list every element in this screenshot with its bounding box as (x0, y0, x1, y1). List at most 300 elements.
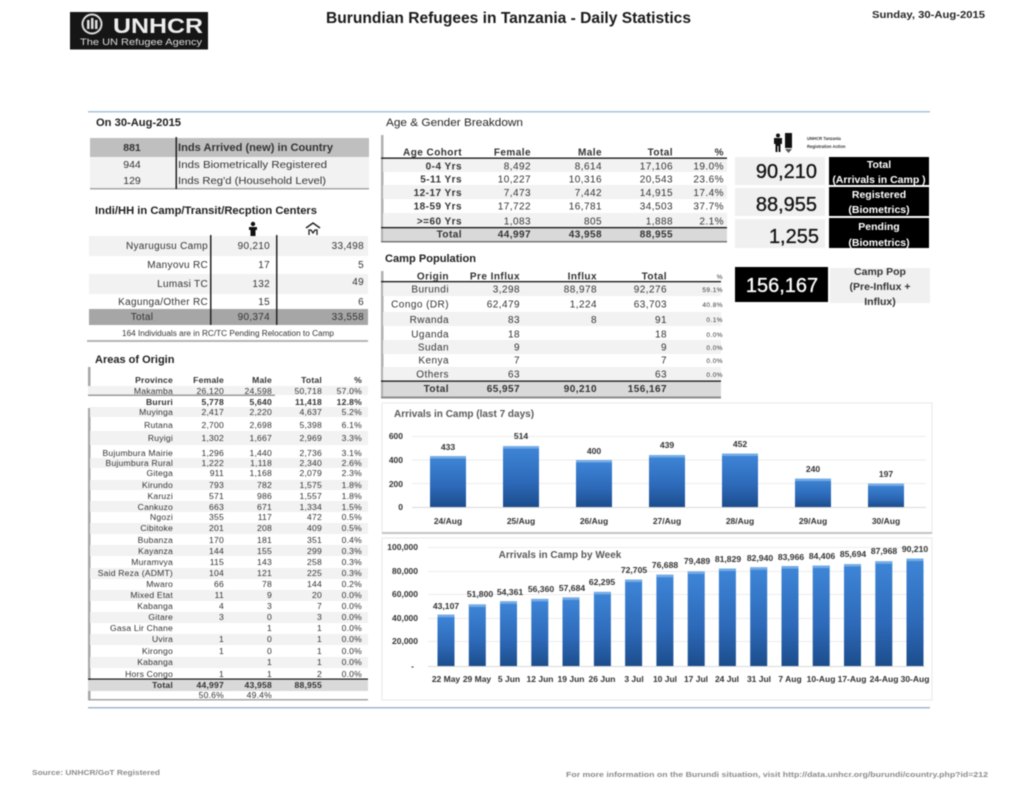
panel: camp population table: 63 (508, 370, 520, 380)
panel: camp population table: Uganda (411, 330, 449, 340)
table rows: 1,118 (250, 458, 272, 468)
panel: camp population table: 9 (514, 342, 520, 354)
table rows: Kayanza (138, 546, 173, 556)
table total: 50.6% (199, 690, 224, 700)
table rows: Said Reza (ADMT) (98, 568, 173, 578)
panel: age and gender table: 8,492 (504, 162, 531, 172)
table rows: 225 (307, 568, 322, 578)
table rows: Gitega (146, 468, 173, 478)
panel: camp population table: 88,978 (564, 284, 597, 296)
table rows: 144 (209, 546, 224, 556)
panel: camp population table: 62,479 (487, 300, 520, 310)
table rows: Bujumbura Mairie (102, 448, 173, 458)
table rows: 3.3% (342, 433, 362, 443)
table rows: Kabanga (137, 601, 173, 611)
footer: more information: For more information on the Burundi situation, visit http://data.unhcr.org/burundi/country.php?id=212 (566, 770, 988, 779)
panel: daily arrivals table: Inds Biometrically Registered (178, 159, 327, 171)
panel: camp population total: 156,167 (746, 275, 818, 297)
x axis labels: 17 Jul (684, 674, 708, 684)
table header: % (354, 375, 362, 385)
table rows: 1,440 (249, 448, 272, 458)
table rows: 1 (267, 669, 272, 679)
panel: age and gender table: Male (578, 148, 602, 158)
text: registration action note (807, 136, 846, 149)
table rows: Cibitoke (140, 523, 173, 533)
table rows: 5,398 (299, 420, 322, 430)
table rows: 2,220 (249, 407, 272, 417)
table rows: Makamba (134, 386, 173, 396)
panel: camp population table: Kenya (418, 356, 449, 366)
x axis labels: 10-Aug (807, 674, 835, 684)
table rows: 2,340 (299, 458, 322, 468)
panel: camp and transit table: Nyarugusu Camp (126, 241, 208, 252)
data labels: 62,295 (589, 577, 615, 587)
panel: age and gender table: 10,316 (569, 174, 602, 186)
x axis labels: 5 Jun (498, 674, 520, 684)
bar highlights (430, 446, 904, 486)
table rows: 78 (262, 579, 272, 589)
panel: age and gender table (381, 135, 727, 242)
panel: age and gender table: 10,227 (498, 174, 531, 186)
table rows: 24,598 (244, 386, 272, 396)
table rows: 208 (257, 523, 272, 533)
panel: camp population table: 92,276 (634, 284, 667, 296)
table rows: 115 (210, 557, 224, 567)
text: registration action note: Registration Action (807, 144, 846, 149)
table rows: Rutana (144, 420, 173, 430)
top rule (88, 111, 930, 112)
panel: camp population table: 63,703 (634, 300, 667, 310)
panel: camp and transit table: 17 (258, 260, 270, 271)
data labels: 83,966 (778, 552, 804, 562)
panel: camp population table: 3,298 (493, 284, 520, 296)
table rows: 0 (267, 612, 272, 622)
table rows: 66 (214, 579, 224, 589)
panel: camp population table: 7 (661, 356, 667, 366)
panel: age and gender table: 7,473 (504, 188, 531, 199)
panel: camp and transit table: 49 (352, 277, 364, 288)
table rows: Cankuzo (138, 502, 173, 512)
x axis labels: 29 May (463, 674, 491, 684)
table rows: 1 (267, 623, 272, 633)
x axis labels: 17-Aug (838, 674, 866, 684)
panel: pending biometrics: Pending (858, 221, 900, 233)
text: registration action note: UNHCR Tanzania (807, 136, 842, 141)
table rows: 986 (257, 491, 272, 501)
table rows: 6.1% (342, 420, 362, 430)
table rows: 11 (215, 590, 224, 600)
table rows: 4,637 (299, 407, 322, 417)
panel: camp population table: 18 (655, 330, 667, 340)
data labels: 81,829 (715, 554, 741, 564)
x axis labels: 31 Jul (747, 674, 771, 684)
panel: age and gender table: 12-17 Yrs (414, 188, 462, 199)
panel: camp and transit table (87, 235, 368, 342)
bottom rule (88, 707, 930, 708)
y axis: 0 (398, 502, 403, 512)
table rows: 117 (258, 512, 272, 522)
chart: arrivals in camp last 7 days (382, 403, 932, 534)
panel: camp and transit table: 33,498 (332, 241, 364, 252)
panel: age and gender table: 34,503 (640, 202, 673, 212)
y axis: 100,000 (387, 542, 418, 552)
panel: camp population table: 0.0% (706, 332, 723, 339)
data labels: 79,489 (684, 556, 710, 566)
panel: camp population table: 0.0% (706, 358, 723, 365)
heading: age and gender: Age & Gender Breakdown (386, 117, 523, 129)
chart title: Arrivals in Camp by Week (499, 550, 622, 561)
data labels: 87,968 (871, 546, 897, 556)
data labels: 433 (441, 442, 455, 452)
panel: camp and transit table: 132 (252, 279, 270, 290)
data labels: 400 (587, 446, 601, 456)
x axis labels: 22 May (432, 674, 460, 684)
table rows: 3.1% (342, 448, 362, 458)
x axis labels: 10 Jul (653, 674, 677, 684)
table rows: 472 (307, 512, 322, 522)
table rows: Bujumbura Rural (106, 458, 173, 468)
table rows: 2.6% (342, 458, 362, 468)
panel: camp population table: Total (642, 272, 667, 282)
table total: 88,955 (294, 680, 322, 690)
data labels: 57,684 (559, 583, 585, 593)
table rows: 258 (307, 557, 322, 567)
table rows: Gitare (148, 612, 173, 622)
table rows: 1.8% (342, 480, 362, 490)
table rows: 0.5% (342, 523, 362, 533)
table rows: 2,698 (249, 420, 272, 430)
table rows: 351 (307, 535, 322, 545)
table rows: 2,969 (299, 433, 322, 443)
x axis labels: 12 Jun (527, 674, 553, 684)
table rows: 2,079 (299, 468, 322, 478)
data labels: 85,694 (840, 549, 866, 559)
table rows: 1 (317, 634, 322, 644)
panel: camp population table: Congo (DR) (391, 300, 449, 310)
panel: registered biometrics: (Biometrics) (848, 204, 910, 216)
panel: camp and transit table: 33,558 (332, 312, 364, 323)
panel: camp population total: (Pre-Influx + (850, 281, 910, 293)
x axis labels: 24 Jul (715, 674, 739, 684)
table rows: 1,222 (201, 458, 224, 468)
panel: camp population table: Rwanda (410, 315, 449, 326)
footer: source: Source: UNHCR/GoT Registered (32, 768, 160, 777)
chart title: Arrivals in Camp (last 7 days) (394, 409, 534, 420)
table rows: 793 (209, 480, 224, 490)
panel: age and gender table: 1,083 (504, 216, 531, 228)
table rows: 0.5% (342, 512, 362, 522)
table total: Total (152, 680, 173, 690)
table rows: 0.0% (342, 590, 362, 600)
table rows: 2 (317, 669, 322, 679)
table rows: 181 (257, 535, 272, 545)
title: Burundian Refugees in Tanzania - Daily Statistics (326, 10, 691, 27)
y axis: 80,000 (392, 566, 418, 576)
x axis labels: 19 Jun (558, 674, 584, 684)
panel: daily arrivals table: 881 (123, 142, 141, 154)
panel: age and gender table: 2.1% (699, 216, 724, 228)
data labels: 240 (806, 464, 820, 474)
table rows: Kirundo (142, 480, 173, 490)
logo: UNHCR: UNHCR (113, 15, 203, 38)
table rows: 1.8% (342, 491, 362, 501)
heading: areas of origin: Areas of Origin (95, 354, 175, 366)
panel: camp population total: Camp Pop (854, 266, 906, 278)
panel: camp population table: Others (416, 370, 449, 380)
table rows: 0.3% (342, 568, 362, 578)
panel: camp population table: 63 (655, 370, 667, 380)
x axis labels: 24/Aug (434, 516, 462, 526)
y axis: - (411, 661, 414, 671)
table rows: 3 (317, 612, 322, 622)
data labels (433, 544, 928, 611)
panel: camp population table: 156,167 (628, 384, 667, 395)
table rows: 0.0% (342, 634, 362, 644)
table rows: 1,667 (249, 433, 272, 443)
table rows: Kabanga (137, 657, 173, 667)
table rows: 1,302 (201, 433, 224, 443)
table rows: 5,640 (249, 397, 272, 407)
table rows: 3 (219, 612, 224, 622)
table rows: Ruyigi (148, 433, 173, 443)
table rows: Bubanza (138, 535, 173, 545)
table rows: 0.2% (342, 579, 362, 589)
panel: camp population table: 90,210 (564, 384, 597, 395)
table rows: 782 (257, 480, 272, 490)
panel: total arrivals in camp: 90,210 (756, 161, 817, 183)
panel: age and gender table: Age Cohort (403, 148, 462, 158)
table header (135, 375, 362, 385)
x axis labels: 30/Aug (872, 516, 900, 526)
panel: camp population table (381, 271, 723, 398)
icon: house (306, 223, 320, 235)
table rows: 1,557 (299, 491, 322, 501)
panel: age and gender table: 17.4% (693, 188, 724, 199)
panel: camp and transit table: 5 (358, 260, 364, 271)
data labels: 72,705 (621, 565, 647, 575)
table rows: Bururi (146, 397, 173, 407)
panel: camp population table: 1,224 (570, 300, 597, 310)
data labels: 43,107 (433, 601, 459, 611)
table total: 43,958 (244, 680, 272, 690)
table rows: 571 (209, 491, 224, 501)
panel: age and gender table: 88,955 (640, 230, 673, 240)
x axis labels (432, 674, 929, 684)
panel: camp and transit table: 90,374 (238, 312, 270, 323)
panel: camp population total: Influx) (864, 296, 896, 308)
panel: areas of origin table (88, 367, 368, 700)
table rows: 0 (267, 634, 272, 644)
table rows: 2,417 (201, 407, 224, 417)
table rows: 1 (317, 657, 322, 667)
y axis (389, 431, 403, 512)
y axis (387, 542, 418, 671)
panel: camp population table: 0.0% (706, 345, 723, 352)
panel: camp and transit table: Kagunga/Other RC (118, 297, 208, 308)
data labels: 439 (660, 440, 674, 450)
panel: daily arrivals table: 129 (123, 175, 141, 187)
table header: Total (301, 375, 322, 385)
panel: camp population table: 0.0% (706, 372, 723, 379)
panel: age and gender table: 17,106 (640, 162, 673, 172)
panel: total arrivals in camp (735, 157, 929, 186)
table rows: 1.5% (342, 502, 362, 512)
panel: camp population table: 83 (508, 315, 520, 326)
panel: camp population table: Total (424, 384, 449, 395)
table rows: 143 (257, 557, 272, 567)
panel: age and gender table: 19.0% (693, 162, 724, 172)
table rows: 0.0% (342, 657, 362, 667)
panel: pending biometrics (735, 218, 929, 249)
y axis: 40,000 (392, 613, 418, 623)
logo: UNHCR (70, 12, 208, 50)
table rows: 5.2% (342, 407, 362, 417)
table rows: 671 (257, 502, 272, 512)
table rows: Muyinga (139, 407, 173, 417)
table rows: 7 (317, 601, 322, 611)
table rows: 0.0% (342, 646, 362, 656)
table rows: 170 (209, 535, 224, 545)
table rows: Muramvya (131, 557, 173, 567)
table rows: 1 (219, 634, 224, 644)
panel: camp population table: 59.1% (702, 287, 723, 294)
bars (430, 446, 904, 507)
panel: camp population table: 91 (655, 315, 667, 326)
table rows: 20 (312, 590, 322, 600)
table rows: Kirongo (142, 646, 173, 656)
table rows: Mwaro (146, 579, 173, 589)
table rows: 911 (210, 468, 224, 478)
panel: camp population table: 65,957 (487, 384, 520, 395)
table header: Province (135, 375, 173, 385)
panel: age and gender table: 20,543 (640, 174, 673, 186)
heading: camp population: Camp Population (385, 253, 476, 265)
panel: age and gender table: >=60 Yrs (417, 216, 462, 228)
x axis labels: 25/Aug (507, 516, 535, 526)
table rows: Mixed Etat (130, 590, 173, 600)
table rows: 1 (317, 623, 322, 633)
table rows: 121 (257, 568, 272, 578)
panel: registered biometrics (735, 187, 929, 216)
table header: Female (193, 375, 224, 385)
table rows: 0.0% (342, 601, 362, 611)
panel: camp population table: % (717, 274, 723, 281)
panel: camp and transit table: Manyovu RC (147, 260, 208, 271)
panel: camp and transit table: 90,210 (238, 241, 270, 252)
x axis labels: 27/Aug (653, 516, 681, 526)
table rows: 1 (219, 646, 224, 656)
data labels: 84,406 (809, 551, 835, 561)
table total: 44,997 (196, 680, 224, 690)
table rows: 0.0% (342, 669, 362, 679)
panel: age and gender table: 37.7% (693, 202, 724, 212)
panel: age and gender table: Female (494, 148, 531, 158)
table rows: 0.0% (342, 623, 362, 633)
icon: person (249, 222, 257, 236)
y axis: 20,000 (392, 636, 418, 646)
x axis labels: 24-Aug (870, 674, 898, 684)
x axis labels: 7 Aug (778, 674, 802, 684)
panel: age and gender table: 5-11 Yrs (420, 174, 462, 186)
panel: camp and transit table: 6 (358, 297, 364, 308)
table rows: Ngozi (150, 512, 173, 522)
table rows (98, 386, 362, 679)
table rows: 355 (209, 512, 224, 522)
panel: pending biometrics: (Biometrics) (848, 237, 910, 249)
table rows: 1 (267, 657, 272, 667)
logo: UNHCR: The UN Refugee Agency (80, 37, 202, 48)
data labels: 51,800 (467, 589, 493, 599)
panel: daily arrivals table: 944 (123, 159, 141, 171)
panel: daily arrivals table (90, 137, 369, 190)
panel: age and gender table: 44,997 (498, 230, 531, 240)
panel: registered biometrics: Registered (852, 189, 906, 201)
table rows: 0 (267, 646, 272, 656)
table rows: 0.3% (342, 546, 362, 556)
panel: camp population table: Burundi (411, 284, 449, 296)
panel: camp population table: 7 (514, 356, 520, 366)
panel: age and gender table: % (715, 148, 724, 158)
table rows: 1,334 (299, 502, 322, 512)
table rows: 12.8% (337, 397, 362, 407)
panel: total arrivals in camp: Total (867, 159, 891, 171)
y axis: 60,000 (392, 589, 418, 599)
date: Sunday, 30-Aug-2015 (872, 9, 985, 21)
table rows: 11,418 (295, 397, 322, 407)
table rows: 3 (267, 601, 272, 611)
chart: arrivals in camp by week (382, 538, 932, 700)
table rows: 26,120 (196, 386, 224, 396)
panel: camp and transit table: 15 (258, 297, 270, 308)
table header: Male (252, 375, 272, 385)
data labels: 197 (879, 469, 893, 479)
data labels: 90,210 (902, 544, 928, 554)
data labels (441, 431, 893, 479)
table rows: 57.0% (337, 386, 362, 396)
heading: individuals and households: Indi/HH in Camp/Transit/Recption Centers (95, 205, 317, 217)
panel: camp population table: 18 (508, 330, 520, 340)
table rows: 0.3% (342, 557, 362, 567)
table total: 49.4% (247, 690, 272, 700)
y axis: 200 (389, 479, 403, 489)
panel: age and gender table: 17,722 (498, 202, 531, 212)
table rows: 0.0% (342, 612, 362, 622)
y axis: 600 (389, 431, 403, 441)
table rows: 409 (307, 523, 322, 533)
data labels: 54,361 (497, 587, 523, 597)
table rows: 1,575 (299, 480, 322, 490)
panel: camp and transit table: Lumasi TC (157, 279, 208, 290)
panel: camp population table: Pre Influx (470, 272, 520, 282)
table rows: 2,700 (201, 420, 224, 430)
panel: camp population total (735, 266, 930, 308)
panel: daily arrivals table: Inds Arrived (new) in Country (178, 142, 334, 154)
x axis labels: 29/Aug (799, 516, 827, 526)
x axis labels: 3 Jul (624, 674, 644, 684)
table rows: 1 (317, 646, 322, 656)
bars (438, 559, 924, 666)
panel: camp population table: Origin (417, 272, 449, 282)
panel: registered biometrics: 88,955 (756, 194, 817, 216)
x axis labels: 28/Aug (726, 516, 754, 526)
table rows: 0.4% (342, 535, 362, 545)
table rows: 9 (267, 590, 272, 600)
table rows: 155 (257, 546, 272, 556)
table rows: 50,718 (294, 386, 322, 396)
panel: age and gender table: 1,888 (646, 216, 673, 228)
table rows: 1 (219, 669, 224, 679)
panel: camp population table: Influx (568, 272, 597, 282)
